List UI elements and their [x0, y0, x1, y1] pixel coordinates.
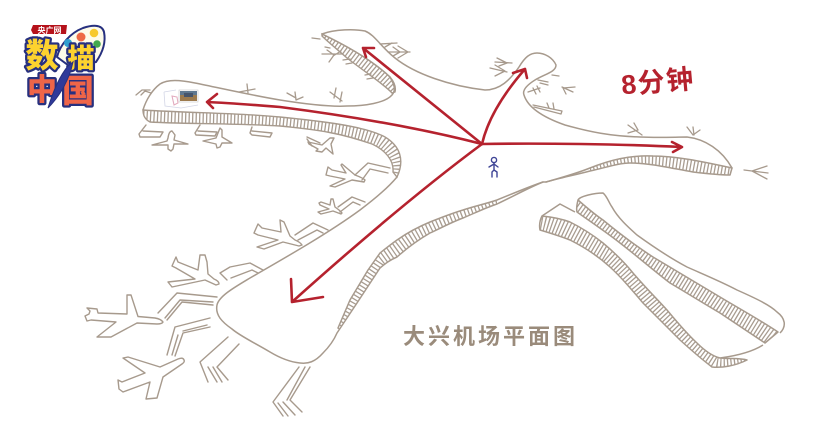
red route arrows	[207, 48, 682, 302]
logo: palette	[57, 26, 105, 68]
plane 4	[254, 220, 302, 249]
north-west pier hatched wall	[322, 34, 395, 93]
arrow: north-east	[482, 69, 527, 144]
small photo thumbnail with mini sketch	[164, 90, 198, 108]
plane 8	[152, 131, 188, 151]
plane 2	[118, 357, 184, 399]
aircraft parked at the gates	[85, 128, 365, 399]
time label: 8分钟	[620, 64, 696, 100]
logo: 中	[27, 74, 57, 107]
arrow: south-west	[291, 144, 482, 302]
logo: 描	[68, 44, 94, 74]
auxiliary building: upper wing	[577, 193, 784, 343]
plane 9	[203, 128, 232, 148]
auxiliary building: lower wing	[540, 204, 763, 367]
jet bridges	[139, 125, 390, 416]
plane 5	[318, 199, 342, 214]
plane 1	[85, 295, 163, 337]
map caption: 大兴机场平面图	[403, 324, 578, 349]
logo: red banner	[31, 25, 67, 34]
plane 6	[326, 164, 365, 187]
logo: title characters: 数	[26, 37, 58, 74]
arrow: west	[207, 94, 482, 144]
logo: 央广网	[38, 25, 62, 35]
person icon	[489, 157, 498, 177]
west pier hatched wall	[143, 110, 401, 177]
small sketch marks along the piers	[136, 38, 768, 179]
arrow: east	[482, 142, 682, 152]
logo: 国	[62, 73, 94, 109]
logo: brush	[48, 62, 73, 108]
plane 7	[308, 138, 334, 154]
plane 3	[168, 255, 219, 287]
south-west pier hatched wall	[338, 202, 497, 330]
terminal building outline	[143, 30, 732, 363]
logo	[26, 25, 105, 109]
arrow: north-west	[363, 48, 482, 144]
east pier hatched wall	[590, 160, 732, 172]
